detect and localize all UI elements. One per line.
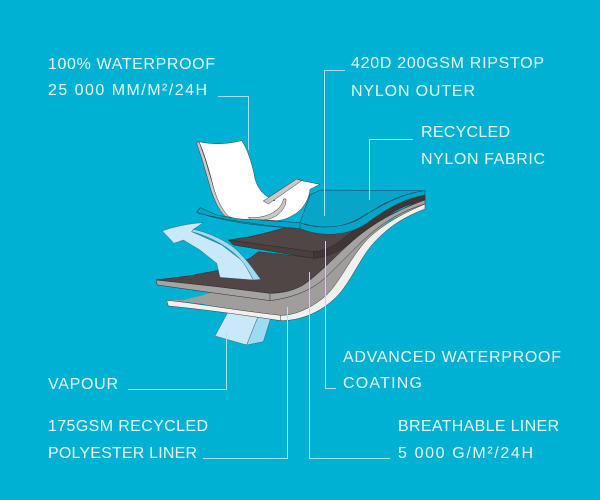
label: breathable liner xyxy=(398,418,559,462)
label: recycled nylon fabric xyxy=(421,124,545,168)
label: 100% waterproof xyxy=(48,56,215,99)
label: advanced waterproof coating: ADVANCED WATERPROOF xyxy=(343,349,561,366)
fabric diagram xyxy=(156,141,425,345)
label: breathable liner: BREATHABLE LINER xyxy=(398,418,559,435)
label: ripstop nylon outer: NYLON OUTER xyxy=(351,83,475,100)
icon: vapour arrow upper xyxy=(162,223,261,280)
layer: nylon outer xyxy=(197,190,425,234)
icon: vapour arrow lower xyxy=(215,308,273,345)
label: polyester liner: 175GSM RECYCLED xyxy=(48,418,208,435)
label: polyester liner xyxy=(48,418,208,462)
label: ripstop nylon outer xyxy=(351,55,544,100)
label: recycled nylon fabric: RECYCLED xyxy=(421,124,510,141)
label: advanced waterproof coating xyxy=(343,349,561,392)
layer: breathable liner xyxy=(167,202,425,321)
label: polyester liner: POLYESTER LINER xyxy=(48,445,197,462)
leader lines xyxy=(128,70,413,458)
label: 100% waterproof: 100% WATERPROOF xyxy=(48,56,215,73)
label: advanced waterproof coating: COATING xyxy=(343,375,422,392)
label: vapour: VAPOUR xyxy=(48,376,118,393)
label: ripstop nylon outer: 420D 200GSM RIPSTOP xyxy=(351,55,544,72)
label: breathable liner: 5 000 G/M²/24H xyxy=(398,445,533,462)
label: 100% waterproof: 25 000 MM/M²/24H xyxy=(48,82,207,99)
label: recycled nylon fabric: NYLON FABRIC xyxy=(421,151,545,168)
layer: coating base xyxy=(156,197,425,301)
icon: white water arrow xyxy=(197,141,320,221)
layer: waterproof membrane xyxy=(228,194,425,258)
